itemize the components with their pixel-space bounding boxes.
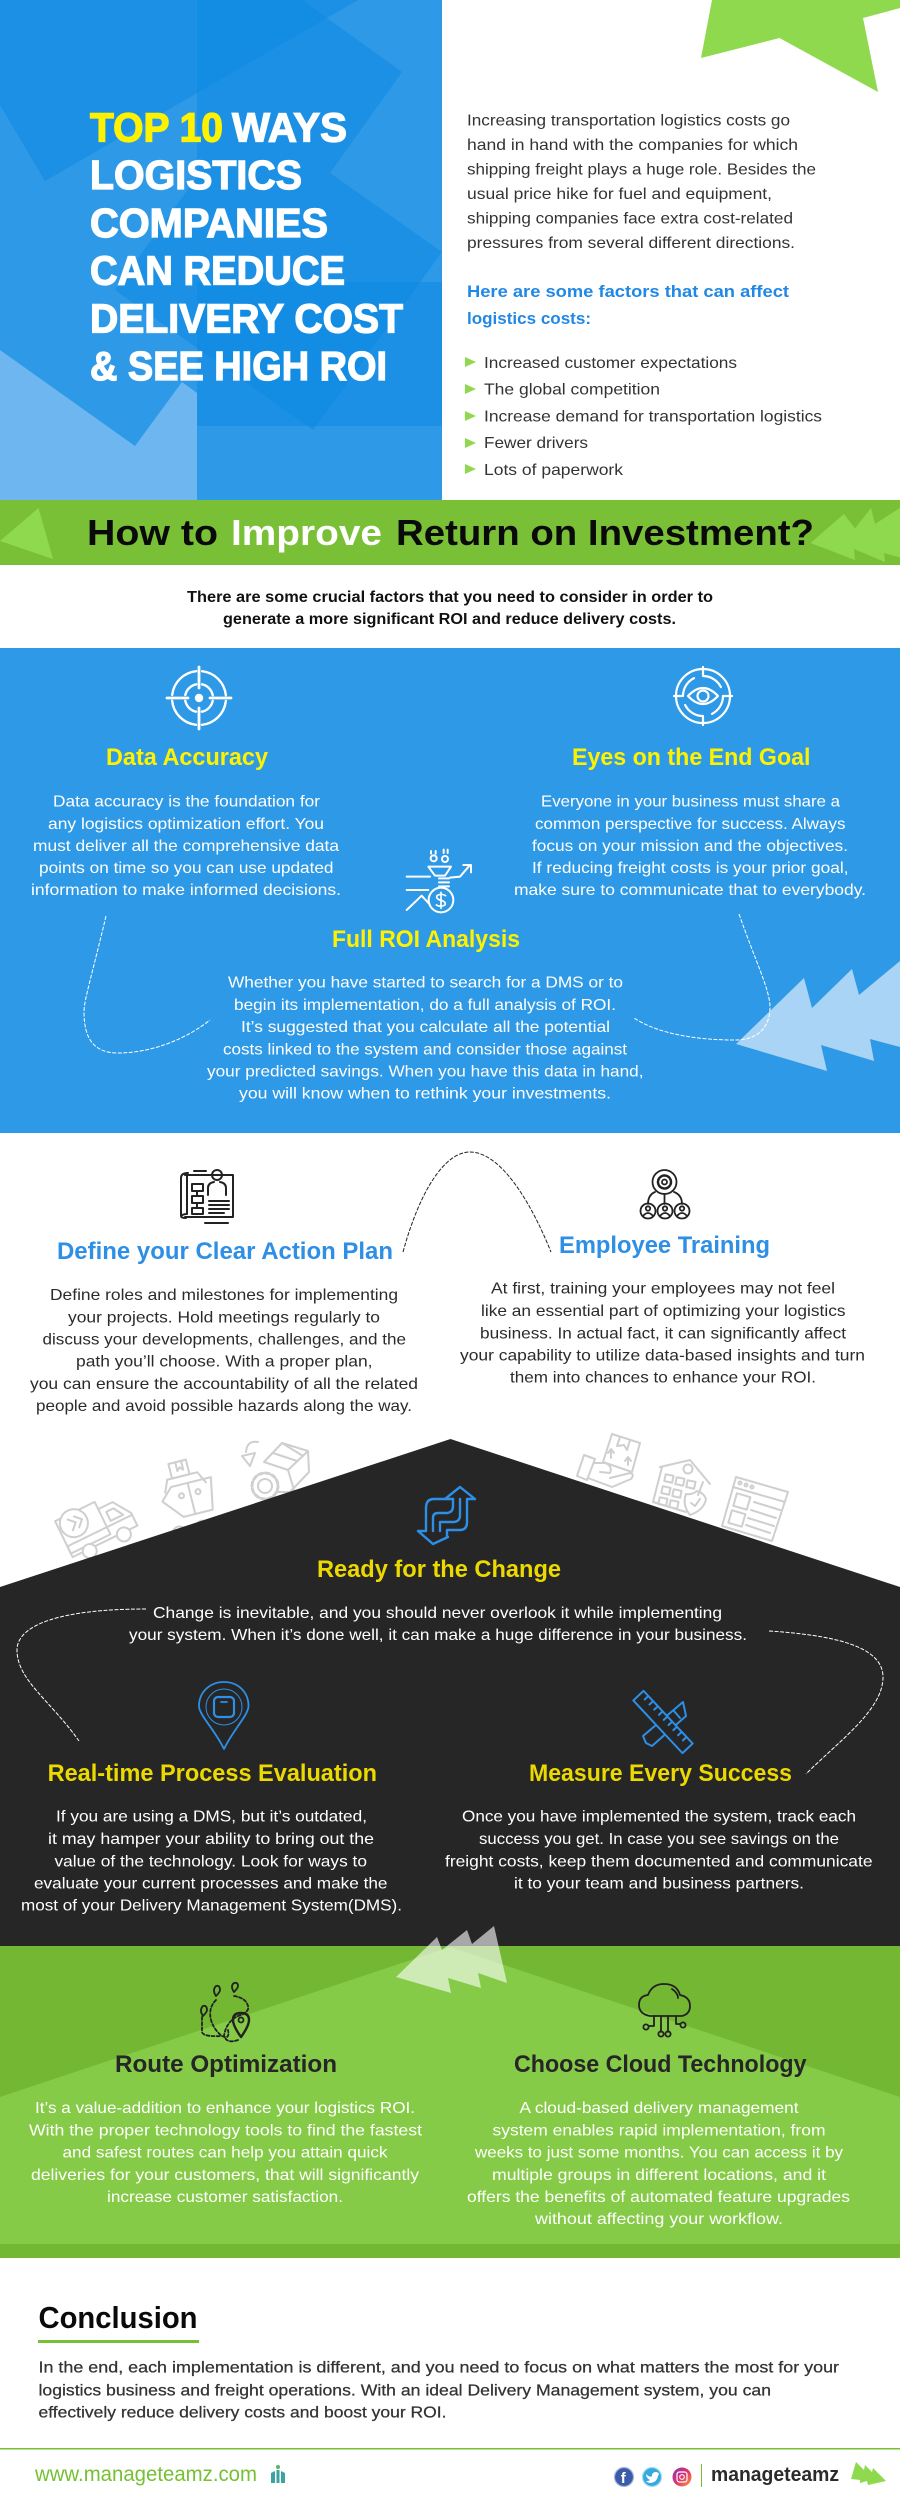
lead paragraph: There are some crucial factors that you need to consider in order to [187, 589, 713, 606]
title [90, 104, 403, 389]
text: eyes on the end goal [514, 794, 866, 899]
text: route optimization: It’s a value-addition to enhance your logistics ROI. [35, 2100, 415, 2117]
text: employee training: your capability to utilize data-based insights and turn [460, 1348, 865, 1365]
heading: eyes on the end goal: Eyes on the End Goal [572, 744, 810, 771]
icon: grey web page [722, 1477, 788, 1541]
text: real-time process evaluation: it may hamper your ability to bring out the [48, 1831, 374, 1848]
text: employee training [460, 1281, 865, 1387]
text: data accuracy: any logistics optimization effort. You [48, 816, 324, 833]
panel: dark section [0, 1439, 900, 1946]
text: choose cloud technology: without affecting your workflow. [534, 2211, 783, 2228]
icon: instagram [672, 2468, 692, 2486]
heading: data accuracy: Data Accuracy [106, 744, 269, 771]
text: data accuracy: Data accuracy is the foundation for [53, 794, 321, 811]
title: CAN REDUCE [90, 248, 345, 294]
text: route optimization: and safest routes can help you attain quick [62, 2145, 389, 2162]
intro text block: Increasing transportation logistics costs go [467, 113, 790, 130]
text: route optimization [29, 2100, 423, 2206]
title: COMPANIES [90, 200, 328, 246]
icon: grey truck [53, 1486, 141, 1565]
text: conclusion: In the end, each implementation is different, and you need to focus on what matters the most for your [38, 2360, 840, 2377]
text: employee training: them into chances to enhance your ROI. [510, 1370, 816, 1387]
arc connector [403, 1152, 551, 1252]
icon: twitter [642, 2468, 662, 2486]
intro text block [467, 113, 816, 252]
text: action plan: you can ensure the accountability of all the related [30, 1376, 418, 1393]
text: choose cloud technology: weeks to just some months. You can access it by [474, 2145, 843, 2162]
factors subheading: Here are some factors that can affect [467, 282, 789, 301]
text: employee training: like an essential part of optimizing your logistics [481, 1303, 846, 1320]
factors subheading: logistics costs: [467, 309, 591, 328]
icon: eye on goal [674, 667, 732, 725]
text: measure every success: it to your team and business partners. [514, 1876, 804, 1893]
icon: change arrows [418, 1487, 475, 1544]
lead paragraph [187, 589, 713, 628]
factors list: Increase demand for transportation logistics [484, 408, 822, 426]
panel: green section [0, 1946, 900, 2258]
title: & SEE HIGH ROI [90, 343, 387, 389]
text: eyes on the end goal: Everyone in your business must share a [541, 794, 840, 811]
text: eyes on the end goal: common perspective for success. Always [535, 816, 846, 833]
heading: how to improve [87, 512, 814, 553]
icon: route [201, 1983, 249, 2041]
icon: ROI money bag [407, 850, 471, 912]
icon: small people logo [271, 2465, 285, 2483]
text: measure every success: Once you have implemented the system, track each [462, 1809, 856, 1826]
icon: grey box and gear [242, 1442, 309, 1499]
text: employee training: At first, training your employees may not feel [491, 1281, 835, 1298]
title: LOGISTICS [90, 152, 302, 198]
text: full ROI analysis: you will know when to rethink your investments. [239, 1086, 611, 1103]
icon: employee training [640, 1170, 690, 1218]
text: choose cloud technology: A cloud-based delivery management [520, 2100, 799, 2117]
text: measure every success [445, 1809, 873, 1893]
heading: ready for the change: Ready for the Change [317, 1556, 561, 1583]
text: data accuracy: must deliver all the comprehensive data [33, 838, 339, 855]
text: full ROI analysis: Whether you have started to search for a DMS or to [228, 975, 623, 992]
text: real-time process evaluation: most of your Delivery Management System(DMS). [21, 1898, 402, 1915]
text: real-time process evaluation: If you are using a DMS, but it’s outdated, [56, 1809, 367, 1826]
text: route optimization: With the proper technology tools to find the fastest [29, 2122, 423, 2139]
icon: location pin [199, 1682, 248, 1749]
text: action plan: your projects. Hold meetings regularly to [68, 1309, 380, 1326]
text: full ROI analysis [207, 975, 644, 1103]
intro text block: pressures from several different directions. [467, 235, 795, 252]
title: WAYS [232, 104, 347, 150]
text: eyes on the end goal: If reducing freight costs is your prior goal, [532, 860, 848, 877]
brand name: manageteamz [711, 2464, 839, 2486]
icon: target [167, 667, 231, 729]
text: ready for the change [129, 1605, 747, 1644]
factors list [465, 355, 822, 479]
text: choose cloud technology: system enables rapid implementation, from [492, 2122, 826, 2139]
text: route optimization: deliveries for your customers, that will significantly [31, 2167, 419, 2184]
factors list: Lots of paperwork [484, 462, 624, 479]
icon: action plan [181, 1170, 233, 1223]
text: ready for the change: your system. When it’s done well, it can make a huge difference in your business. [129, 1627, 747, 1644]
factors list: Fewer drivers [484, 435, 588, 452]
text: choose cloud technology: offers the benefits of automated feature upgrades [467, 2189, 850, 2206]
heading: real-time process evaluation: Real-time Process Evaluation [48, 1760, 377, 1787]
text: choose cloud technology: multiple groups in different locations, and it [492, 2167, 827, 2184]
text: action plan: people and avoid possible hazards along the way. [36, 1398, 412, 1415]
intro text block: usual price hike for fuel and equipment, [467, 186, 772, 203]
text: data accuracy: points on time so you can use updated [39, 860, 334, 877]
icon: facebook [614, 2468, 634, 2487]
panel: blue factors [0, 648, 900, 1133]
panel: green heading band [0, 500, 900, 565]
decorative white peaks [396, 1926, 507, 1993]
text: choose cloud technology [467, 2100, 850, 2228]
lead paragraph: generate a more significant ROI and reduce delivery costs. [223, 611, 676, 628]
heading: employee training: Employee Training [559, 1232, 770, 1259]
text: full ROI analysis: your predicted savings. When you have this data in hand, [207, 1064, 644, 1081]
heading: route optimization: Route Optimization [115, 2051, 337, 2078]
panel: footer [0, 2448, 900, 2487]
decorative green star [701, 0, 900, 92]
text: conclusion: logistics business and freight operations. With an ideal Delivery Management system, you can [38, 2382, 771, 2399]
text: measure every success: freight costs, keep them documented and communicate [445, 1853, 873, 1870]
factors list: Increased customer expectations [484, 355, 737, 372]
icon: ruler and pencil [633, 1691, 693, 1753]
icon: grey building with shield [653, 1460, 710, 1515]
text: conclusion: effectively reduce delivery costs and boost your ROI. [38, 2405, 446, 2422]
intro text block: hand in hand with the companies for which [467, 137, 798, 154]
text: real-time process evaluation: value of the technology. Look for ways to [54, 1853, 367, 1870]
heading: measure every success: Measure Every Success [529, 1760, 792, 1787]
text: data accuracy: information to make informed decisions. [31, 882, 341, 899]
website link: www.manageteamz.com [34, 2463, 257, 2486]
icon: cloud [639, 1984, 690, 2037]
panel: header hero [0, 0, 442, 500]
heading: how to improve: Improve [231, 512, 382, 553]
title: TOP 10 [90, 104, 223, 150]
text: conclusion [38, 2360, 840, 2422]
text: full ROI analysis: It’s suggested that you calculate all the potential [241, 1019, 610, 1036]
heading: full ROI analysis: Full ROI Analysis [332, 926, 520, 953]
icon: facebook: f [621, 2470, 627, 2487]
text: real-time process evaluation [21, 1809, 402, 1915]
heading: how to improve: How to [87, 512, 218, 553]
heading: how to improve: Return on Investment? [396, 512, 814, 553]
heading: choose cloud technology: Choose Cloud Technology [514, 2051, 807, 2078]
text: full ROI analysis: begin its implementation, do a full analysis of ROI. [234, 997, 616, 1014]
text: eyes on the end goal: make sure to communicate that to everybody. [514, 882, 866, 899]
text: ready for the change: Change is inevitable, and you should never overlook it while implementing [153, 1605, 722, 1622]
heading: conclusion: Conclusion [38, 2300, 198, 2335]
intro text block: shipping companies face extra cost-related [467, 210, 793, 227]
text: route optimization: increase customer satisfaction. [107, 2189, 343, 2206]
title: DELIVERY COST [90, 295, 403, 341]
intro text block: shipping freight plays a huge role. Besides the [467, 162, 816, 178]
text: employee training: business. In actual fact, it can significantly affect [480, 1325, 847, 1342]
icon: grey hand with box [577, 1434, 640, 1487]
text: action plan: discuss your developments, challenges, and the [42, 1331, 406, 1348]
factors subheading [467, 282, 789, 328]
text: data accuracy [31, 794, 341, 899]
text: action plan: path you’ll choose. With a proper plan, [76, 1354, 372, 1371]
text: action plan: Define roles and milestones for implementing [50, 1287, 398, 1304]
icon: grey ship [154, 1452, 232, 1535]
factors list: The global competition [484, 382, 660, 399]
text: full ROI analysis: costs linked to the system and consider those against [223, 1041, 628, 1058]
text: measure every success: success you get. In case you see savings on the [479, 1831, 839, 1848]
text: eyes on the end goal: focus on your mission and the objectives. [532, 838, 848, 855]
text: real-time process evaluation: evaluate your current processes and make the [34, 1876, 388, 1893]
heading: define your clear action plan: Define your Clear Action Plan [57, 1238, 393, 1265]
text: action plan [30, 1287, 418, 1415]
icon: brand arrows [851, 2462, 886, 2485]
